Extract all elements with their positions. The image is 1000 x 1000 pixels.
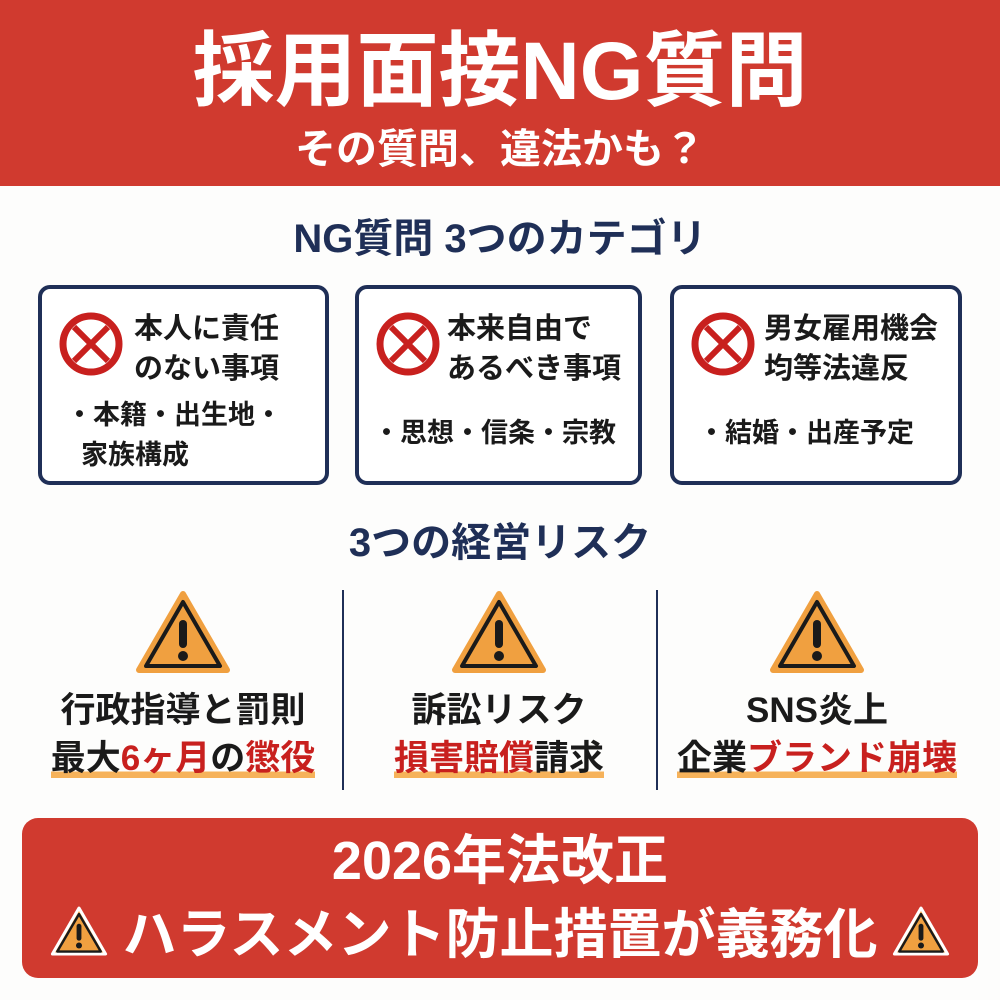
icon: warning bbox=[136, 591, 230, 673]
panel: category 3: ・結婚・出産予定 bbox=[698, 418, 914, 448]
heading: risks: 3つの経営リスク bbox=[349, 521, 651, 565]
panel: category 3 bbox=[670, 285, 962, 485]
icon: prohibited bbox=[692, 312, 754, 376]
icon: prohibited bbox=[376, 312, 440, 376]
risk 1: 最大6ヶ月の懲役 bbox=[51, 739, 315, 778]
panel: category 2 bbox=[355, 285, 642, 485]
risk 2: 訴訟リスク bbox=[411, 691, 586, 730]
panel: category 1: 本人に責任 bbox=[134, 313, 279, 345]
panel: category 2: ・思想・信条・宗教 bbox=[373, 418, 616, 448]
header banner bbox=[0, 0, 1000, 186]
heading: categories: NG質問 3つのカテゴリ bbox=[293, 217, 707, 261]
risk 2 bbox=[394, 591, 604, 778]
panel: category 1: ・本籍・出生地・ bbox=[66, 400, 282, 430]
risk 1 bbox=[51, 591, 315, 778]
risk 3: SNS炎上 bbox=[746, 691, 888, 730]
panel: category 1: のない事項 bbox=[134, 353, 279, 385]
panel: category 2: あるべき事項 bbox=[447, 353, 621, 385]
panel: category 1 bbox=[38, 285, 329, 485]
callout: 2026 law revision bbox=[22, 818, 978, 978]
panel: category 2: 本来自由で bbox=[447, 313, 592, 345]
icon: warning bbox=[452, 591, 546, 673]
callout: 2026 law revision: 2026年法改正 bbox=[332, 831, 668, 891]
risk 2: 損害賠償請求 bbox=[394, 739, 604, 778]
panel: category 3: 均等法違反 bbox=[764, 353, 909, 385]
risk 1: 行政指導と罰則 bbox=[60, 691, 306, 730]
panel: category 1: 家族構成 bbox=[81, 440, 189, 470]
panel: category 3: 男女雇用機会 bbox=[764, 313, 938, 345]
title: 採用面接NG質問 bbox=[192, 26, 808, 117]
risk 3: 企業ブランド崩壊 bbox=[677, 739, 957, 778]
callout: 2026 law revision: ハラスメント防止措置が義務化 bbox=[123, 905, 877, 965]
icon: prohibited bbox=[60, 312, 122, 376]
subtitle: その質問、違法かも？ bbox=[295, 126, 705, 172]
risk 3 bbox=[677, 591, 957, 778]
icon: warning bbox=[770, 591, 864, 673]
